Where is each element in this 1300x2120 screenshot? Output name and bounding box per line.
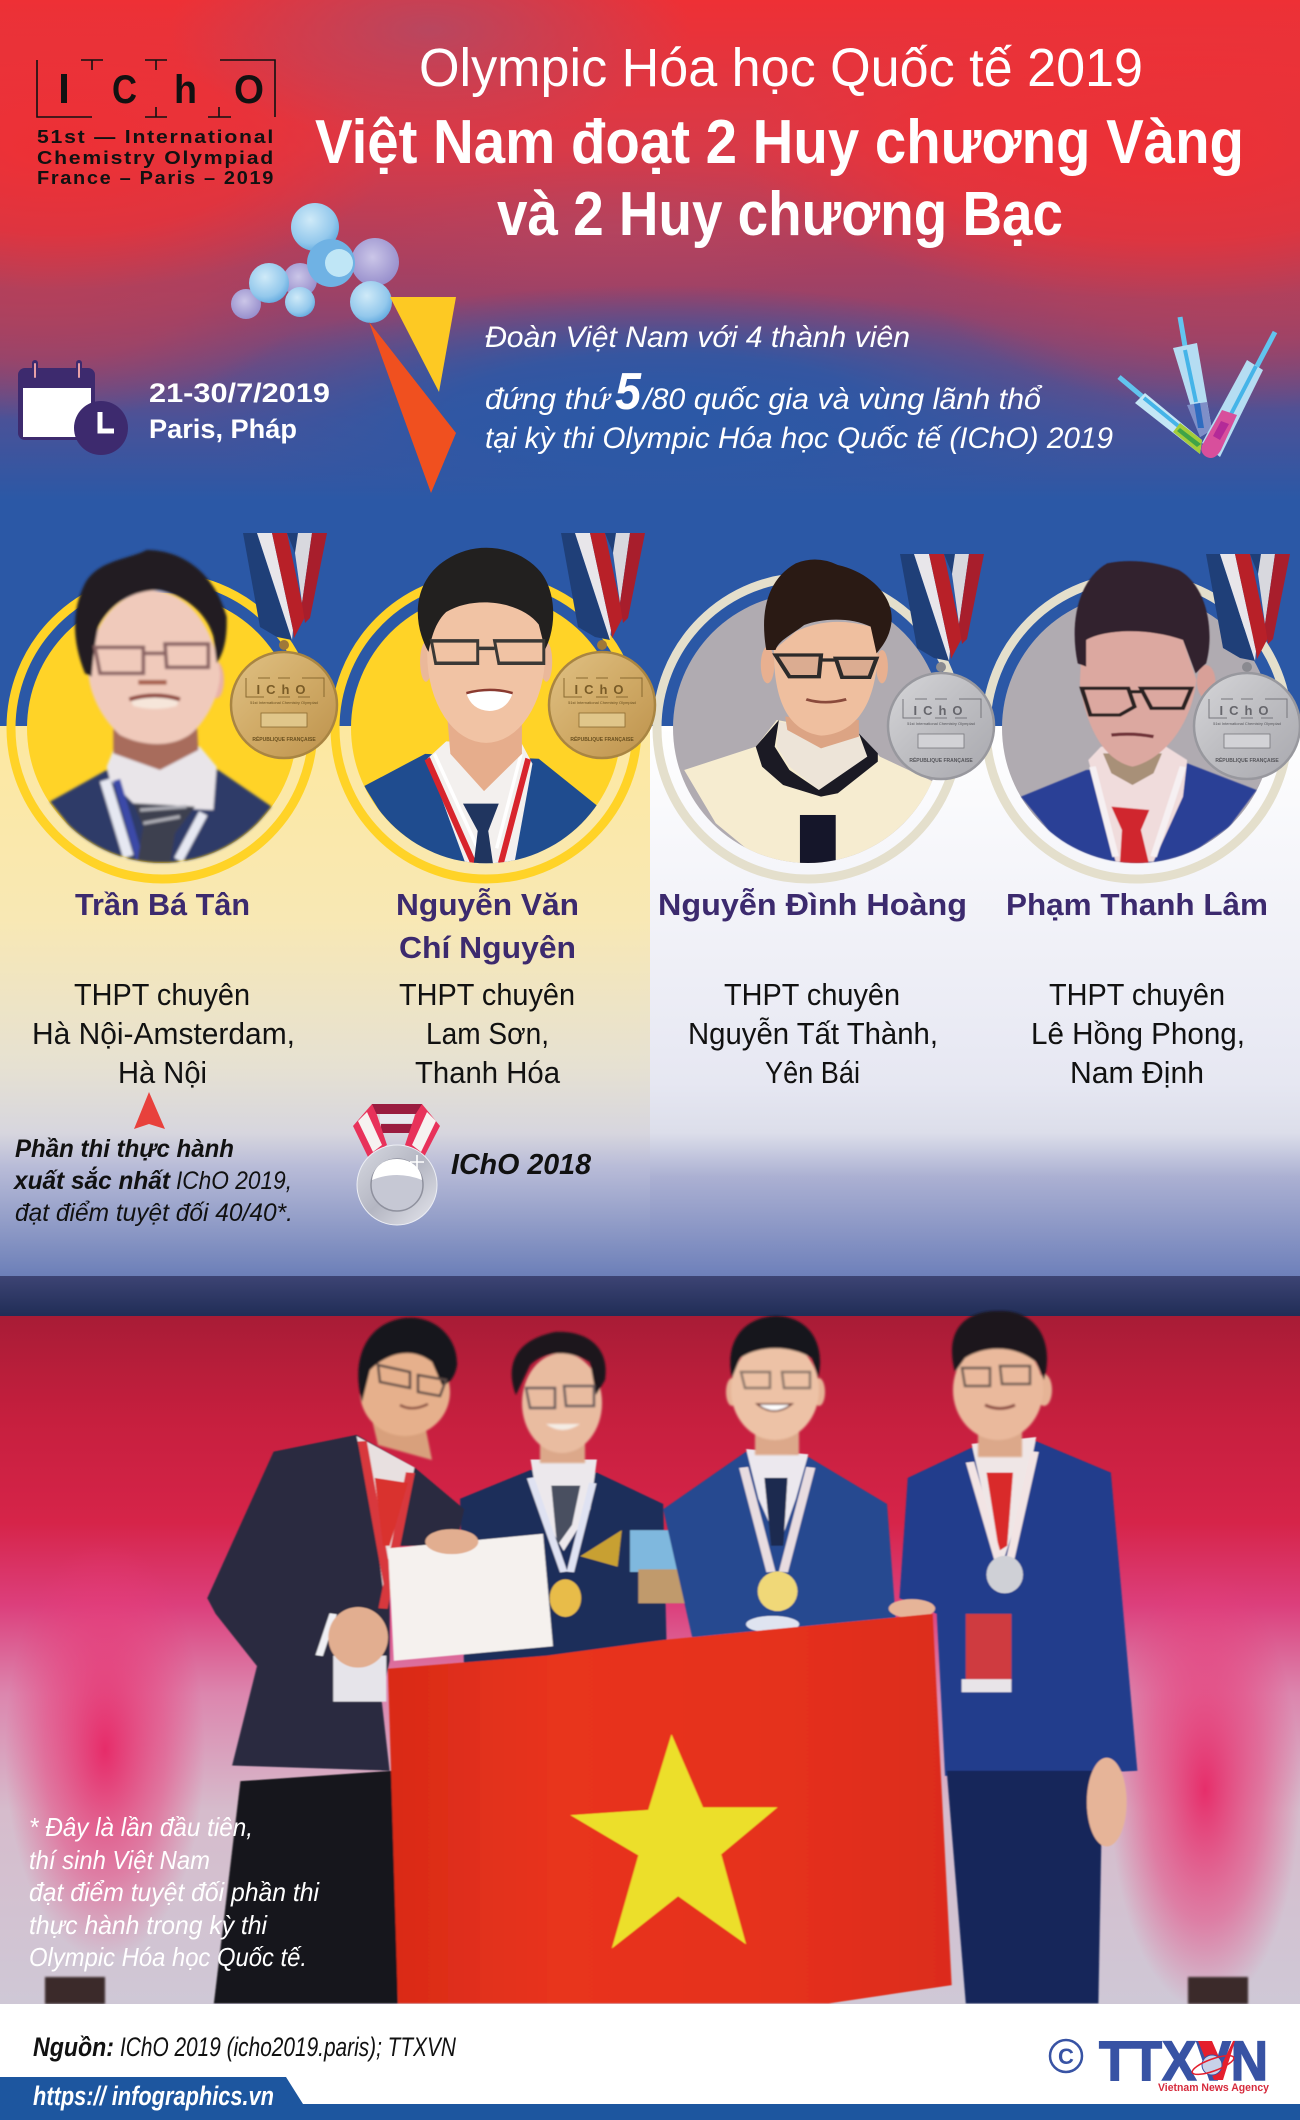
summary text: 5	[615, 363, 642, 421]
dark band above photo	[0, 1276, 1300, 1318]
title: và 2 Huy chương Bạc	[497, 180, 1063, 249]
medal: gold 1: IChO	[256, 682, 312, 697]
person 3 body	[663, 1449, 897, 1656]
student 3 ring and disc	[657, 577, 959, 879]
photo backdrop	[0, 1316, 1300, 2010]
heads	[358, 1311, 1052, 1463]
source: IChO 2019 (icho2019.paris); TTXVN	[120, 2032, 456, 2062]
summary text: /80 quốc gia và vùng lãnh thổ	[641, 383, 1043, 416]
date and place: 21-30/7/2019	[149, 378, 330, 408]
student 4 ring and disc	[986, 577, 1288, 879]
student names: Nguyễn Đình Hoàng	[658, 887, 967, 922]
summary text	[485, 321, 1113, 455]
schools: THPT chuyên	[74, 977, 250, 1012]
panel: silver medal students background	[650, 726, 1300, 1276]
icon: red arrow	[134, 1092, 165, 1129]
footnote: * Đây là lần đầu tiên,	[29, 1812, 253, 1842]
portrait: Phạm Thanh Lâm	[1021, 561, 1257, 865]
icon: calendar and clock	[18, 363, 128, 455]
schools: Hà Nội	[118, 1055, 207, 1090]
flag	[388, 1614, 952, 2003]
medal: gold 1: RÉPUBLIQUE FRANÇAISE	[252, 735, 316, 743]
icon: silver medal IChO 2018	[353, 1104, 440, 1225]
medal: gold 1	[231, 533, 337, 758]
student names: Phạm Thanh Lâm	[1006, 887, 1268, 922]
schools: Nam Định	[1070, 1055, 1204, 1090]
source	[33, 2032, 456, 2062]
medal: gold 2: RÉPUBLIQUE FRANÇAISE	[570, 735, 634, 743]
footnote: thí sinh Việt Nam	[29, 1845, 210, 1875]
head: person 3	[726, 1316, 825, 1455]
schools: THPT chuyên	[1049, 977, 1225, 1012]
person 2 body	[460, 1460, 701, 1677]
logo: IChO	[37, 60, 275, 188]
schools	[32, 977, 1245, 1090]
people bodies and flag	[207, 1435, 1137, 2003]
panel: gold medal students background	[0, 726, 650, 1276]
medal: silver 1: IChO	[913, 703, 969, 718]
decorative triangles	[369, 297, 456, 493]
source: Nguồn:	[33, 2032, 114, 2062]
logo: IChO: O	[234, 68, 264, 112]
medal: gold 2: 51st International Chemistry Olympiad	[568, 700, 636, 705]
schools: Yên Bái	[765, 1055, 860, 1090]
schools: Nguyễn Tất Thành,	[688, 1016, 938, 1051]
logo: TTXVN: C	[1058, 2044, 1074, 2069]
logo: IChO: C	[112, 68, 137, 112]
portrait: Trần Bá Tân	[50, 550, 272, 865]
hand on diploma	[425, 1529, 478, 1554]
person 1 body	[207, 1435, 464, 2003]
callout: best practical exam: đạt điểm tuyệt đối 40/40*.	[15, 1199, 293, 1227]
date and place	[149, 378, 330, 444]
callout: best practical exam: IChO 2019,	[176, 1167, 292, 1195]
medal: silver 2: 51st International Chemistry Olympiad	[1213, 721, 1281, 726]
student 2 ring and disc	[335, 577, 637, 879]
student names: Nguyễn Văn	[396, 887, 579, 922]
background: red to blue gradient header	[0, 0, 1300, 740]
schools: Thanh Hóa	[415, 1055, 561, 1090]
medal: silver 2: IChO	[1219, 703, 1275, 718]
diploma	[388, 1534, 553, 1661]
logo: IChO: h	[174, 68, 197, 112]
logo: IChO: 51st — International	[37, 127, 275, 147]
photo: team with Vietnamese flag	[0, 1311, 1300, 2010]
footnote: thực hành trong kỳ thi	[29, 1910, 268, 1940]
summary text: tại kỳ thi Olympic Hóa học Quốc tế (IChO) 2019	[485, 422, 1113, 455]
label: IChO 2018: IChO 2018	[451, 1149, 592, 1181]
callout: best practical exam	[12, 1135, 293, 1227]
medal: silver 1: 51st International Chemistry Olympiad	[907, 721, 975, 726]
medal: silver 1: RÉPUBLIQUE FRANÇAISE	[909, 756, 973, 764]
logo: IChO: Chemistry Olympiad	[37, 148, 275, 168]
medal: silver 2	[1194, 554, 1300, 779]
date and place: Paris, Pháp	[149, 414, 297, 444]
logo: TTXVN: TTXVN	[1099, 2029, 1268, 2092]
schools: Hà Nội-Amsterdam,	[32, 1016, 295, 1051]
medal: gold 1: 51st International Chemistry Olympiad	[250, 700, 318, 705]
person 4 body	[889, 1437, 1137, 2003]
schools: Lam Sơn,	[426, 1016, 549, 1051]
medal: gold 2	[549, 533, 655, 758]
title	[315, 38, 1244, 249]
footnote: Olympic Hóa học Quốc tế.	[29, 1942, 307, 1972]
icon: test tubes	[1119, 317, 1275, 458]
summary text: Đoàn Việt Nam với 4 thành viên	[485, 321, 910, 354]
schools: THPT chuyên	[399, 977, 575, 1012]
logo: IChO: France – Paris – 2019	[37, 168, 275, 188]
student names: Chí Nguyên	[399, 930, 576, 965]
medal: silver 1	[888, 554, 994, 779]
medal: silver 2: RÉPUBLIQUE FRANÇAISE	[1215, 756, 1279, 764]
callout: best practical exam: Phần thi thực hành	[15, 1135, 234, 1163]
head: person 4	[952, 1311, 1052, 1457]
portrait: Nguyễn Văn Chí Nguyên	[364, 548, 598, 868]
student names	[75, 887, 1268, 965]
footnote	[29, 1812, 320, 1972]
footer	[0, 2004, 1300, 2120]
icon: molecule bubbles	[231, 203, 399, 323]
logo: TTXVN: Vietnam News Agency	[1158, 2082, 1270, 2094]
website bar: https:// infographics.vn	[33, 2081, 274, 2111]
title: Olympic Hóa học Quốc tế 2019	[419, 38, 1143, 98]
website bar	[0, 2077, 1300, 2120]
head: person 2	[512, 1332, 606, 1463]
medal: gold 2: IChO	[574, 682, 630, 697]
schools: Lê Hồng Phong,	[1031, 1016, 1245, 1051]
head: person 1	[358, 1318, 457, 1460]
student names: Trần Bá Tân	[75, 887, 250, 922]
summary text: đứng thứ	[485, 383, 612, 416]
student 1 ring and disc	[11, 577, 313, 879]
callout: best practical exam: xuất sắc nhất	[12, 1166, 172, 1195]
footnote: đạt điểm tuyệt đối phần thi	[29, 1877, 320, 1907]
schools: THPT chuyên	[724, 977, 900, 1012]
portrait: Nguyễn Đình Hoàng	[684, 560, 937, 865]
